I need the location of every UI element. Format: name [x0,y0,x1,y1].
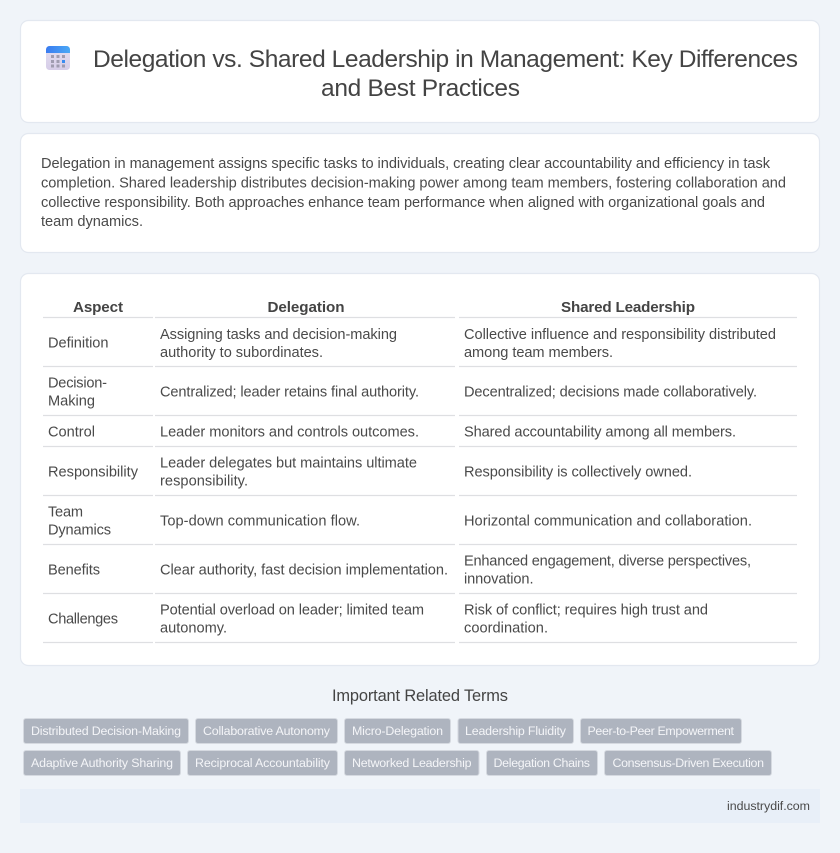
tags: related terms [24,718,772,776]
row: definition: Definition [48,336,108,352]
tag: Consensus-Driven Execution [612,756,764,770]
row: decision-making [48,376,757,410]
row: definition [48,327,776,361]
row: decision-making: Making [48,394,95,410]
tag [486,750,598,776]
row: team dynamics: Top-down communication flow. [160,514,360,530]
tag [196,718,338,744]
tag: Networked Leadership [352,756,472,770]
row: decision-making: Centralized; leader retains final authority. [160,384,419,400]
icon: calendar [46,46,70,70]
table header: Aspect [73,299,123,316]
row: responsibility: responsibility. [160,474,248,490]
panel: comparison table [20,274,820,666]
row: control: Shared accountability among all members. [464,424,736,440]
title: and Best Practices [321,75,520,102]
text block: introduction paragraph [41,156,786,230]
row: challenges: autonomy. [160,620,227,636]
row: responsibility [48,456,692,490]
row: challenges: Challenges [48,612,118,628]
row: challenges [48,602,708,636]
footer: industrydif.com [727,799,810,813]
tag: Adaptive Authority Sharing [31,756,173,770]
row: definition: authority to subordinates. [160,345,323,361]
panel: introduction [20,134,820,252]
table header: Delegation [268,299,344,316]
tag: Leadership Fluidity [465,724,567,738]
title [93,46,798,102]
text block: introduction paragraph: completion. Shared leadership distributes decision-making power among team members, fostering collaboration and [41,176,786,192]
row: challenges: Potential overload on leader; limited team [160,602,424,618]
tag: Delegation Chains [494,756,590,770]
row: team dynamics: Horizontal communication and collaboration. [464,514,752,530]
row: control: Control [48,424,95,440]
row: benefits: Enhanced engagement, diverse perspectives, [464,554,751,570]
tag [604,750,772,776]
row: team dynamics: Dynamics [48,522,111,538]
footer [20,789,820,823]
row: benefits: Benefits [48,562,100,578]
row: definition: Assigning tasks and decision-making [160,327,397,343]
tag: Collaborative Autonomy [203,724,331,738]
row: control [48,424,736,440]
row: challenges: Risk of conflict; requires high trust and [464,602,708,618]
row: benefits: Clear authority, fast decision implementation. [160,562,448,578]
row: decision-making: Decision- [48,376,107,392]
title: Delegation vs. Shared Leadership in Management: Key Differences [93,46,798,73]
tag [344,718,450,744]
row: benefits: innovation. [464,572,534,588]
panel: title card [20,20,820,122]
tag [24,718,188,744]
row: responsibility: Leader delegates but maintains ultimate [160,456,417,472]
row: benefits [48,554,751,588]
tag: Micro-Delegation [352,724,443,738]
table header [73,299,695,316]
tag [344,750,479,776]
row: decision-making: Decentralized; decisions made collaboratively. [464,384,757,400]
row: team dynamics [48,504,752,538]
heading: related terms: Important Related Terms [332,687,508,705]
tag [458,718,574,744]
row: definition: Collective influence and responsibility distributed [464,327,776,343]
table header: Shared Leadership [561,299,695,316]
row: control: Leader monitors and controls outcomes. [160,424,419,440]
tag [24,750,180,776]
row: responsibility: Responsibility is collectively owned. [464,464,692,480]
tag: Distributed Decision-Making [31,724,181,738]
tag [580,718,742,744]
row: responsibility: Responsibility [48,464,139,480]
row: definition: among team members. [464,345,613,361]
text block: introduction paragraph: team dynamics. [41,214,143,230]
text block: introduction paragraph: collective responsibility. Both approaches enhance team performance when aligned with organizational goals and [41,195,765,211]
text block: introduction paragraph: Delegation in management assigns specific tasks to individuals, creating clear accountability and efficiency in task [41,156,771,172]
tag: Peer-to-Peer Empowerment [588,724,735,738]
table grid lines [43,318,797,642]
tag [188,750,338,776]
row: challenges: coordination. [464,620,548,636]
row: team dynamics: Team [48,504,83,520]
tag: Reciprocal Accountability [195,756,331,770]
